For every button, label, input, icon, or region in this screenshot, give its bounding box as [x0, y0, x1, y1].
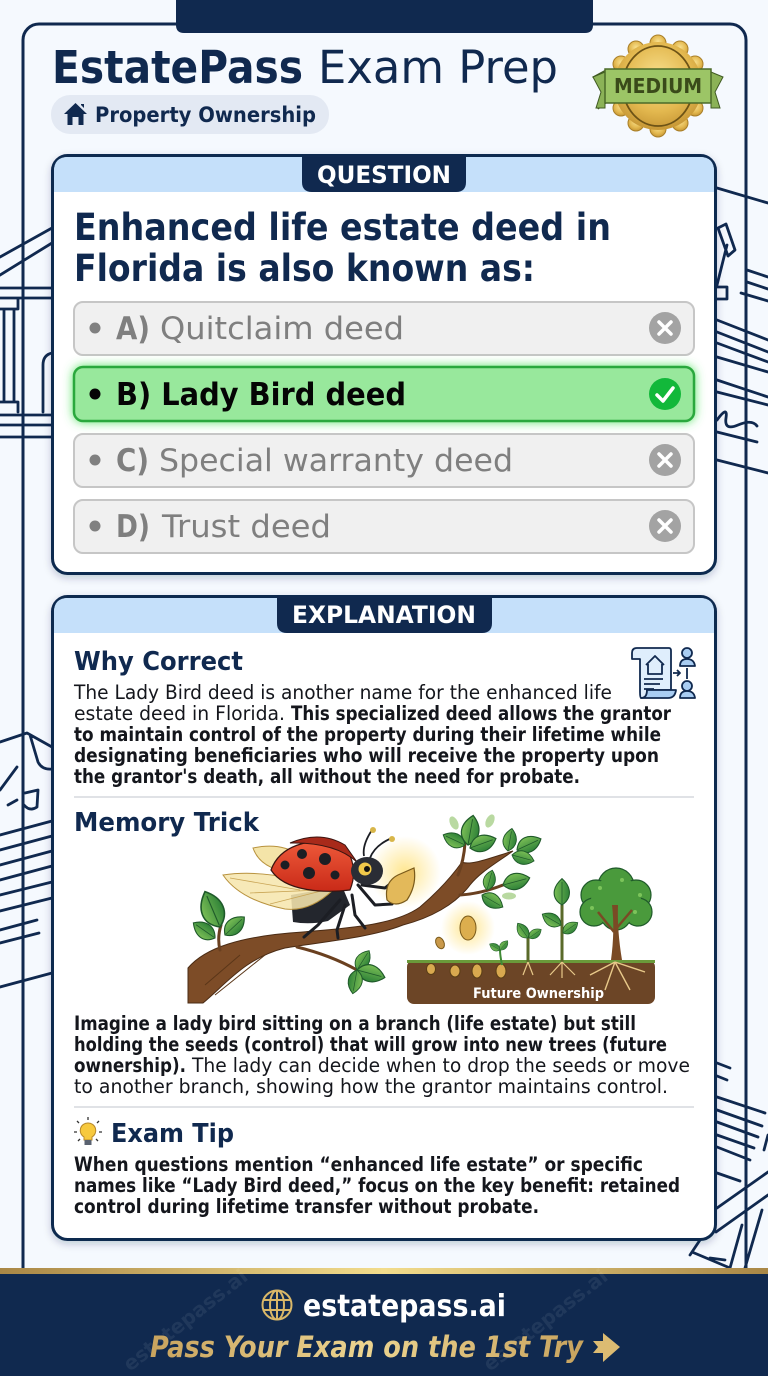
difficulty medal: MEDIUM [614, 74, 702, 98]
why correct text: This specialized deed allows the grantor [291, 702, 671, 725]
option C [74, 434, 694, 487]
option D [74, 500, 694, 553]
illustration: lady bird on branch with seed growing into trees [188, 813, 655, 1004]
exam tip text: names like “Lady Bird deed,” focus on the key benefit: retained [74, 1174, 680, 1197]
memory trick text [74, 1012, 690, 1098]
icon: light bulb [74, 1117, 102, 1145]
panel: question [52, 155, 716, 574]
ladybird shell [271, 837, 357, 891]
watermarks: estatepass.ai [478, 1264, 612, 1376]
memory trick text: to another branch, showing how the grantor maintains control. [74, 1075, 668, 1098]
title: Exam Prep [318, 41, 558, 94]
why correct text: the grantor's death, all without the need for probate. [74, 765, 580, 788]
question text: Florida is also known as: [74, 247, 535, 290]
branch with twigs [188, 843, 513, 1003]
held seed [386, 868, 415, 904]
difficulty medal [593, 35, 723, 137]
why correct text: estate deed in Florida. [74, 702, 285, 725]
why correct text: to maintain control of the property during their lifetime while [74, 723, 661, 746]
question text [74, 206, 611, 290]
why correct heading: Why Correct [74, 647, 243, 677]
falling seeds and sprouts [426, 901, 510, 978]
title: EstatePass [52, 41, 303, 94]
option C: C) [116, 443, 149, 479]
option C: Special warranty deed [159, 443, 513, 479]
exam tip text: When questions mention “enhanced life estate” or specific [74, 1153, 643, 1176]
ladybird body and legs [291, 880, 395, 938]
saplings [513, 879, 581, 978]
category pill [51, 95, 329, 134]
option D: Trust deed [161, 509, 331, 545]
why correct text: designating beneficiaries who will receive the property upon [74, 744, 659, 767]
watermarks: estatepass.ai [118, 1264, 252, 1376]
option B: correct [74, 367, 694, 421]
icon: house [64, 103, 87, 125]
question label [302, 155, 466, 192]
explanation label: EXPLANATION [292, 601, 476, 629]
question text: Enhanced life estate deed in [74, 206, 611, 249]
title [52, 41, 558, 94]
ladybird head and antennae [351, 827, 395, 885]
explanation label [277, 596, 492, 633]
option A: A) [116, 311, 150, 347]
website: estatepass.ai [303, 1289, 506, 1324]
memory trick text: ownership). [74, 1054, 186, 1077]
memory trick heading: Memory Trick [74, 808, 260, 838]
footer [0, 1264, 768, 1376]
why correct text: The Lady Bird deed is another name for the enhanced life [73, 681, 612, 704]
icon: globe [262, 1290, 292, 1320]
memory trick text: Imagine a lady bird sitting on a branch (life estate) but still [74, 1012, 636, 1035]
panel: explanation [52, 596, 716, 1240]
glow around held seed [369, 836, 441, 908]
option B: correct: B) Lady Bird deed [116, 377, 406, 413]
option A: Quitclaim deed [160, 311, 404, 347]
tagline: Pass Your Exam on the 1st Try [150, 1330, 584, 1364]
leaves [189, 813, 544, 995]
category pill: Property Ownership [95, 103, 316, 127]
top binder tab [176, 0, 593, 33]
icon: deed with grantor and beneficiary [632, 648, 695, 698]
memory trick text: holding the seeds (control) that will grow into new trees (future [74, 1033, 667, 1056]
exam tip text [74, 1153, 680, 1218]
soil bed: Future Ownership [473, 986, 604, 1002]
watermarks [118, 1264, 612, 1376]
ladybird wings [223, 846, 333, 909]
question label: QUESTION [317, 161, 451, 189]
tree [580, 868, 652, 990]
soil bed [407, 960, 655, 1004]
exam tip text: control during lifetime transfer without probate. [74, 1195, 539, 1218]
icon: arrow [593, 1333, 620, 1362]
background line art: courthouse and deed sketches [0, 188, 768, 1268]
exam tip heading: Exam Tip [111, 1119, 234, 1149]
why correct text [73, 681, 671, 788]
option A [74, 302, 694, 355]
option D: D) [116, 509, 150, 545]
memory trick text: The lady can decide when to drop the seeds or move [191, 1054, 690, 1077]
